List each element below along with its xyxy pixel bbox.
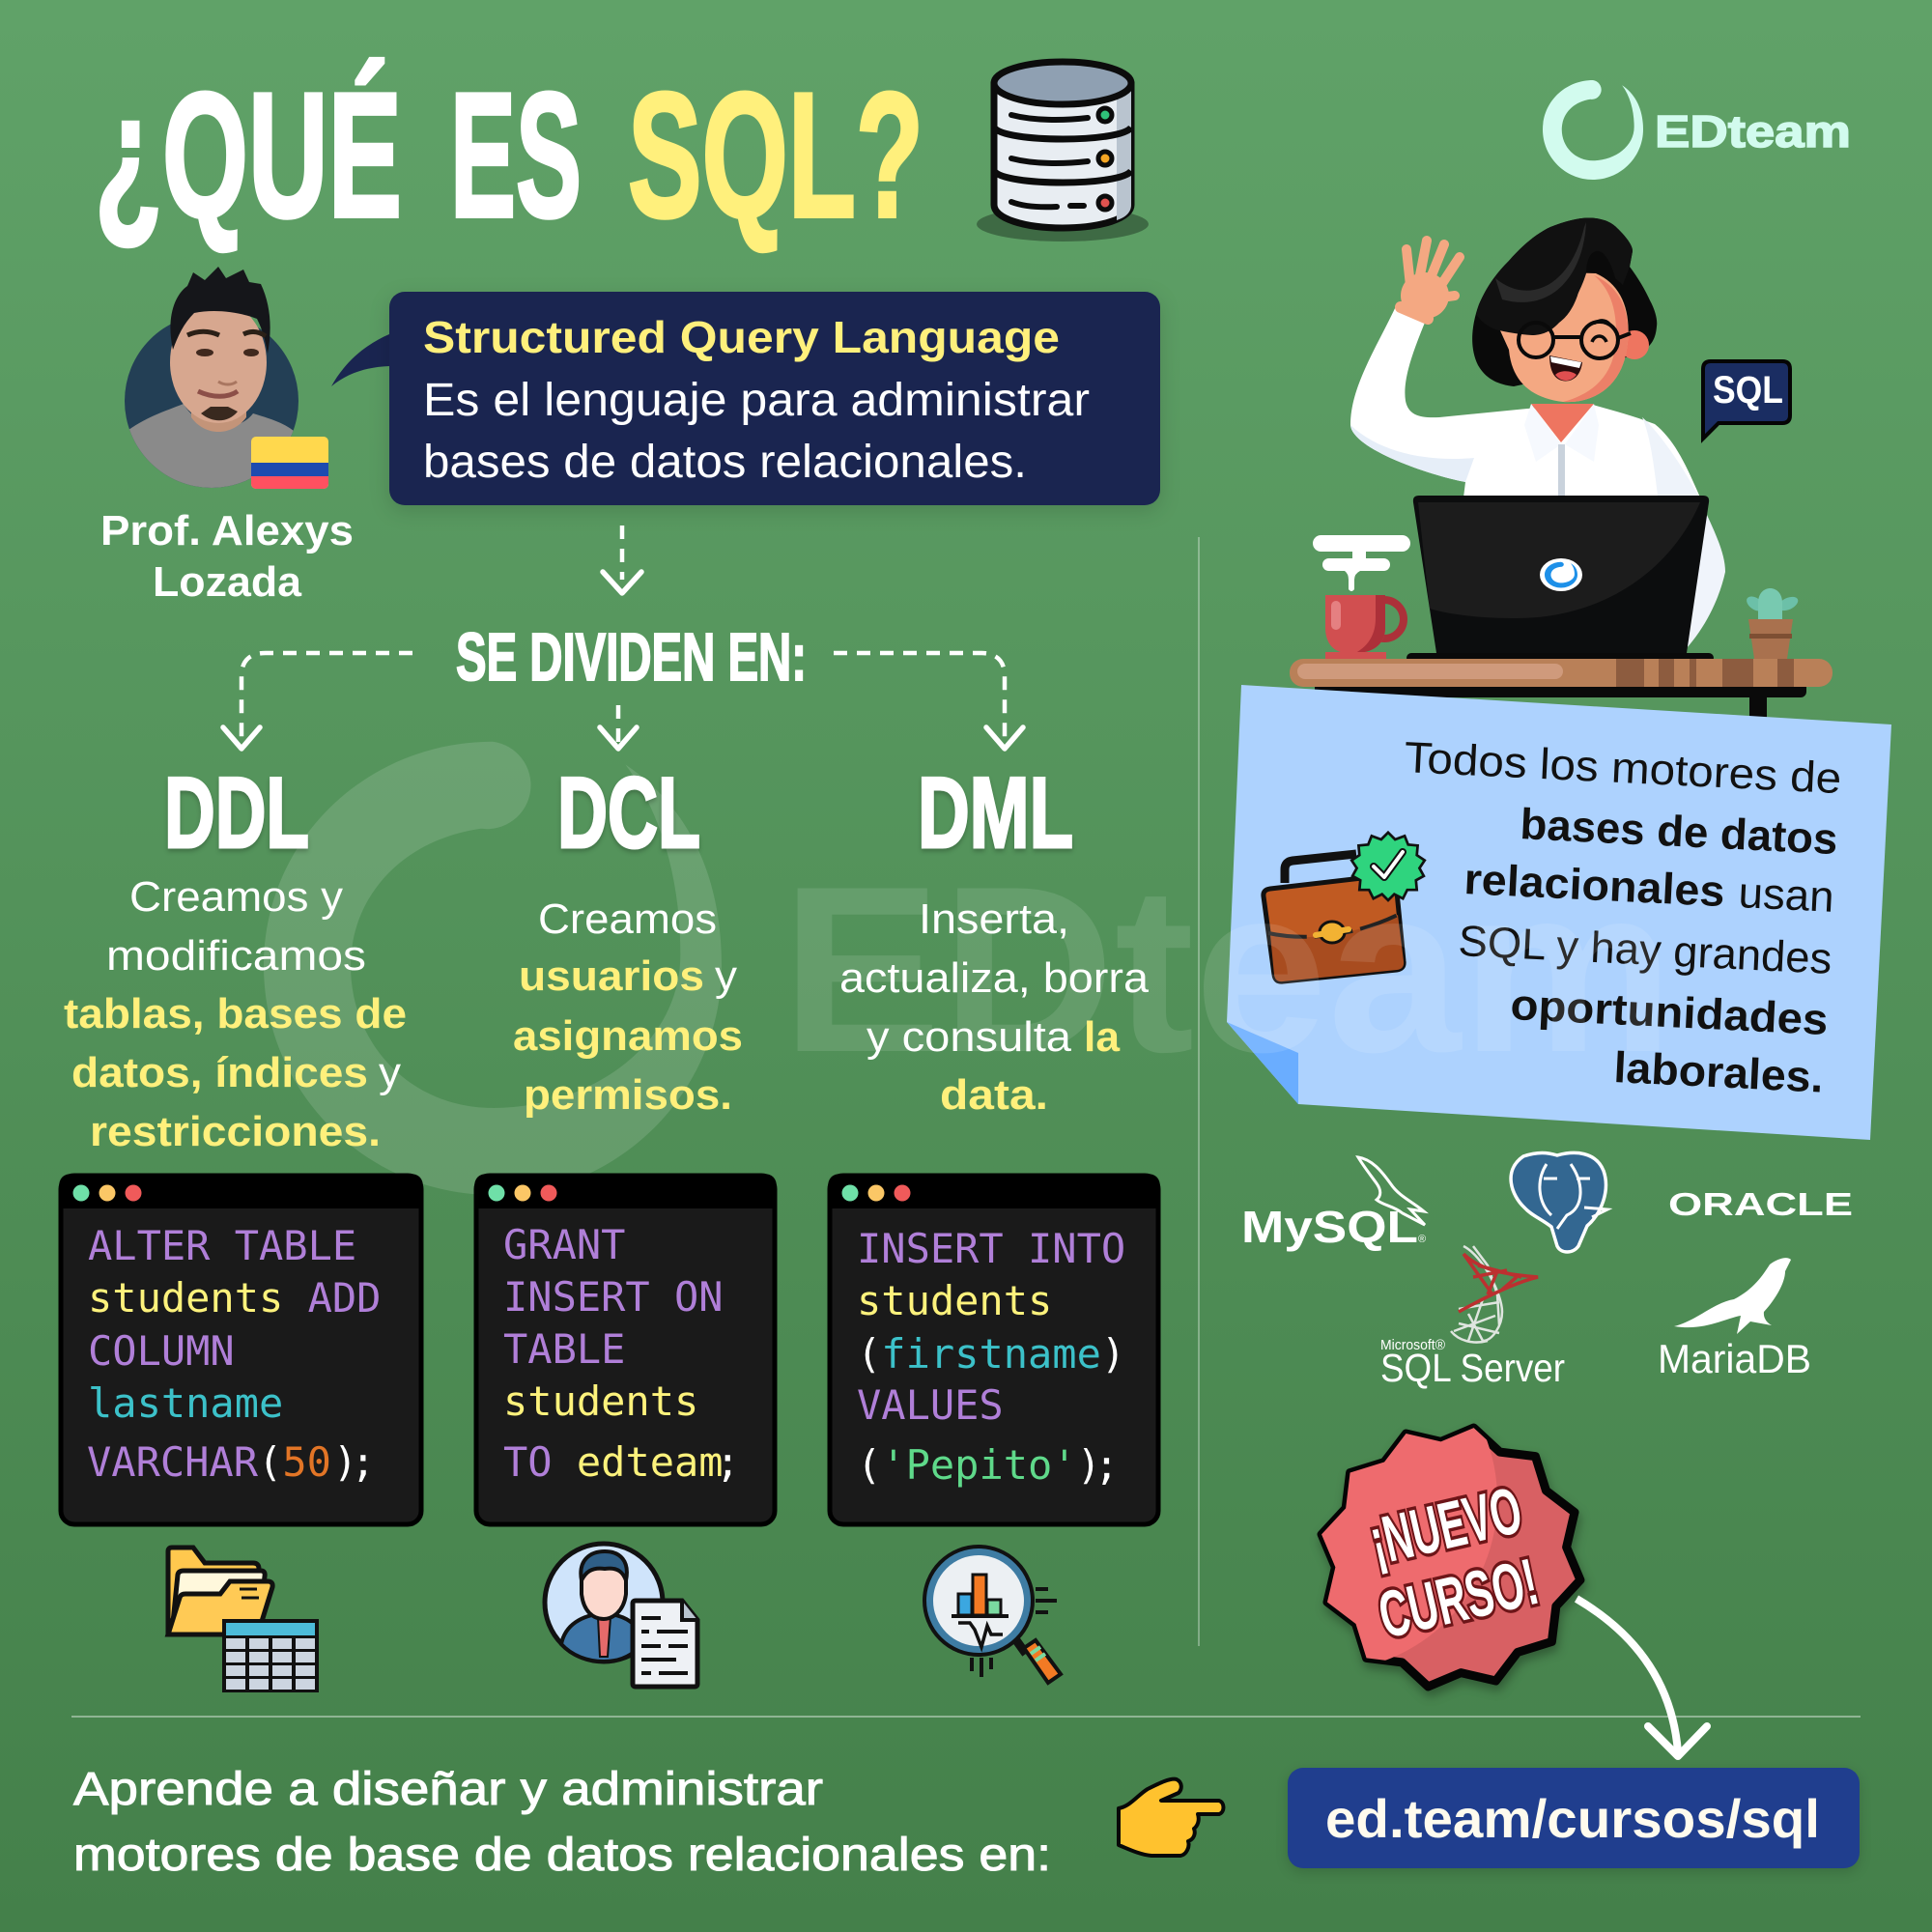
text: DML description: la: [1084, 1013, 1121, 1061]
arrow: to DML: [834, 653, 1023, 749]
icon: briefcase: [1264, 833, 1425, 981]
text: DDL description: restricciones.: [90, 1108, 381, 1155]
code window: DDL: [59, 1174, 423, 1524]
code window: DDL: ALTER TABLE: [88, 1222, 356, 1269]
speech bubble: SQL: [1703, 361, 1790, 439]
code window: DML: students: [857, 1277, 1052, 1324]
face: [1499, 273, 1629, 402]
text: DDL description: [64, 873, 407, 1155]
text: DCL description: permisos.: [524, 1071, 732, 1119]
laptop base: [1406, 653, 1714, 663]
code window: DCL: INSERT ON: [503, 1273, 724, 1321]
text: DML description: data.: [940, 1071, 1048, 1119]
title: SQL?: [628, 55, 923, 254]
text: DCL description: Creamos: [538, 895, 717, 943]
illustration: character at desk: [1290, 217, 1833, 719]
callout: definition: bases de datos relacionales.: [423, 437, 1027, 488]
logo: MySQL: MySQL: [1241, 1202, 1418, 1252]
code window: DML: (firstname): [857, 1330, 1125, 1378]
footer text: [73, 1764, 1051, 1881]
desk: [1290, 659, 1833, 719]
text: DML description: [839, 895, 1150, 1119]
callout: definition: Es el lenguaje para administrar: [423, 375, 1090, 426]
text: DDL description: modificamos: [106, 932, 366, 980]
heading: DDL: DDL: [164, 757, 309, 869]
heading: DCL: DCL: [557, 757, 700, 869]
logo: Oracle: ORACLE: [1668, 1186, 1853, 1222]
code window: DDL: lastname: [88, 1379, 283, 1427]
arrow: to DDL: [223, 653, 412, 749]
code window: DCL: GRANT: [503, 1221, 625, 1268]
title: [95, 55, 923, 254]
divider line: [1198, 537, 1200, 1646]
callout: definition: [331, 292, 1160, 505]
portrait: Prof. Alexys: [125, 267, 328, 489]
glasses: [1519, 323, 1553, 357]
code window: DDL: students ADD: [88, 1274, 381, 1321]
text: DCL description: [513, 895, 743, 1119]
logo: SQL Server: Microsoft®: [1380, 1337, 1445, 1353]
callout: definition: Structured Query Language: [423, 312, 1060, 362]
link button: [1288, 1768, 1860, 1868]
arrow: definition to division: [603, 526, 641, 593]
note fold: [1227, 1022, 1298, 1104]
heading: se dividen en: SE DIVIDEN EN:: [456, 619, 807, 695]
text: DML description: Inserta,: [919, 895, 1069, 943]
text: DDL description: Creamos y: [129, 873, 343, 921]
badge: nuevo curso: ¡NUEVO: [1363, 1473, 1528, 1579]
mug with steam: [1313, 535, 1410, 660]
heading: DML: DML: [918, 757, 1073, 869]
logo: EDteam: EDteam: [1655, 106, 1851, 156]
note text: usan: [1738, 867, 1835, 922]
footer rule: [71, 1716, 1861, 1718]
hand: [1401, 241, 1460, 319]
logo: MariaDB: [1658, 1258, 1811, 1381]
code window: DCL: students: [503, 1378, 698, 1425]
text: DCL description: usuarios: [519, 952, 704, 1000]
badge: nuevo curso: [1317, 1424, 1589, 1699]
code window: DML: ('Pepito');: [857, 1441, 1119, 1489]
icon: pointing hand: [1119, 1779, 1223, 1856]
professor name: Prof. Alexys: [100, 507, 354, 554]
text: DML description: actualiza, borra: [839, 954, 1150, 1002]
code window: DDL: COLUMN: [88, 1327, 235, 1375]
text: DDL description: y: [379, 1049, 401, 1096]
text: DDL description: tablas, bases de: [64, 990, 407, 1037]
icon: database: [977, 62, 1149, 242]
neck: [1531, 404, 1594, 442]
icon: user and document: [545, 1544, 697, 1687]
hair back: [1472, 217, 1657, 386]
note text: [1404, 732, 1842, 1102]
text: DDL description: datos, índices: [71, 1049, 368, 1096]
footer text: motores de base de datos relacionales en:: [73, 1830, 1051, 1881]
icon: folder and table: [168, 1548, 317, 1690]
cactus: [1744, 588, 1801, 659]
code window: DCL: TABLE: [503, 1325, 625, 1373]
note text: oportunidades: [1510, 980, 1830, 1044]
torso shading: [1642, 417, 1698, 496]
code window: DML: [828, 1174, 1160, 1524]
logo: MariaDB: MariaDB: [1658, 1336, 1811, 1381]
arrow: badge to link: [1577, 1599, 1707, 1756]
note text: laborales.: [1613, 1042, 1825, 1102]
code window: DML: INSERT INTO: [857, 1225, 1125, 1272]
code window: DML: VALUES: [857, 1381, 1004, 1429]
title: ¿QUÉ: [95, 55, 402, 254]
logo: PostgreSQL: [1511, 1152, 1607, 1252]
speech bubble: SQL: SQL: [1713, 369, 1783, 412]
logo: EDteam: [1543, 80, 1851, 180]
note: job opportunities: [1227, 685, 1891, 1140]
note text: Todos los motores de: [1404, 732, 1842, 803]
body and shirt: [1350, 304, 1700, 497]
link button: ed.team/cursos/sql: [1325, 1788, 1820, 1849]
watermark text: EDteam: [781, 837, 1674, 1101]
ear: [1620, 330, 1649, 359]
code window: DCL: TO edteam;: [503, 1438, 740, 1486]
professor name: Lozada: [153, 558, 302, 606]
logo: SQL Server: SQL Server: [1380, 1346, 1565, 1390]
text: DCL description: asignamos: [513, 1012, 743, 1060]
note text: relacionales: [1463, 854, 1726, 916]
arrow: to DCL: [600, 705, 637, 749]
logo: MySQL: [1241, 1157, 1426, 1252]
logo: MySQL: ®: [1418, 1234, 1426, 1245]
mouth: [1549, 355, 1582, 381]
footer text: Aprende a diseñar y administrar: [73, 1764, 823, 1815]
laptop: [1413, 496, 1709, 653]
text: DML description: y consulta: [867, 1013, 1072, 1061]
icon: magnifier with chart: [924, 1547, 1061, 1683]
logo: SQL Server: [1380, 1246, 1565, 1390]
right arm: [1662, 496, 1725, 649]
code window: DCL: [474, 1174, 777, 1524]
watermark ring: [264, 742, 722, 1195]
shirt shadow: [1350, 425, 1474, 482]
collar: [1524, 404, 1599, 462]
code window: DDL: VARCHAR(50);: [87, 1438, 375, 1486]
hair front: [1476, 217, 1633, 335]
title: ES: [450, 55, 582, 254]
note text: SQL y hay grandes: [1458, 916, 1833, 983]
laptop logo: [1540, 558, 1582, 591]
professor name: [100, 507, 354, 606]
text: DCL description: y: [715, 952, 737, 1000]
badge: nuevo curso: CURSO!: [1372, 1545, 1545, 1653]
note text: bases de datos: [1520, 799, 1839, 864]
